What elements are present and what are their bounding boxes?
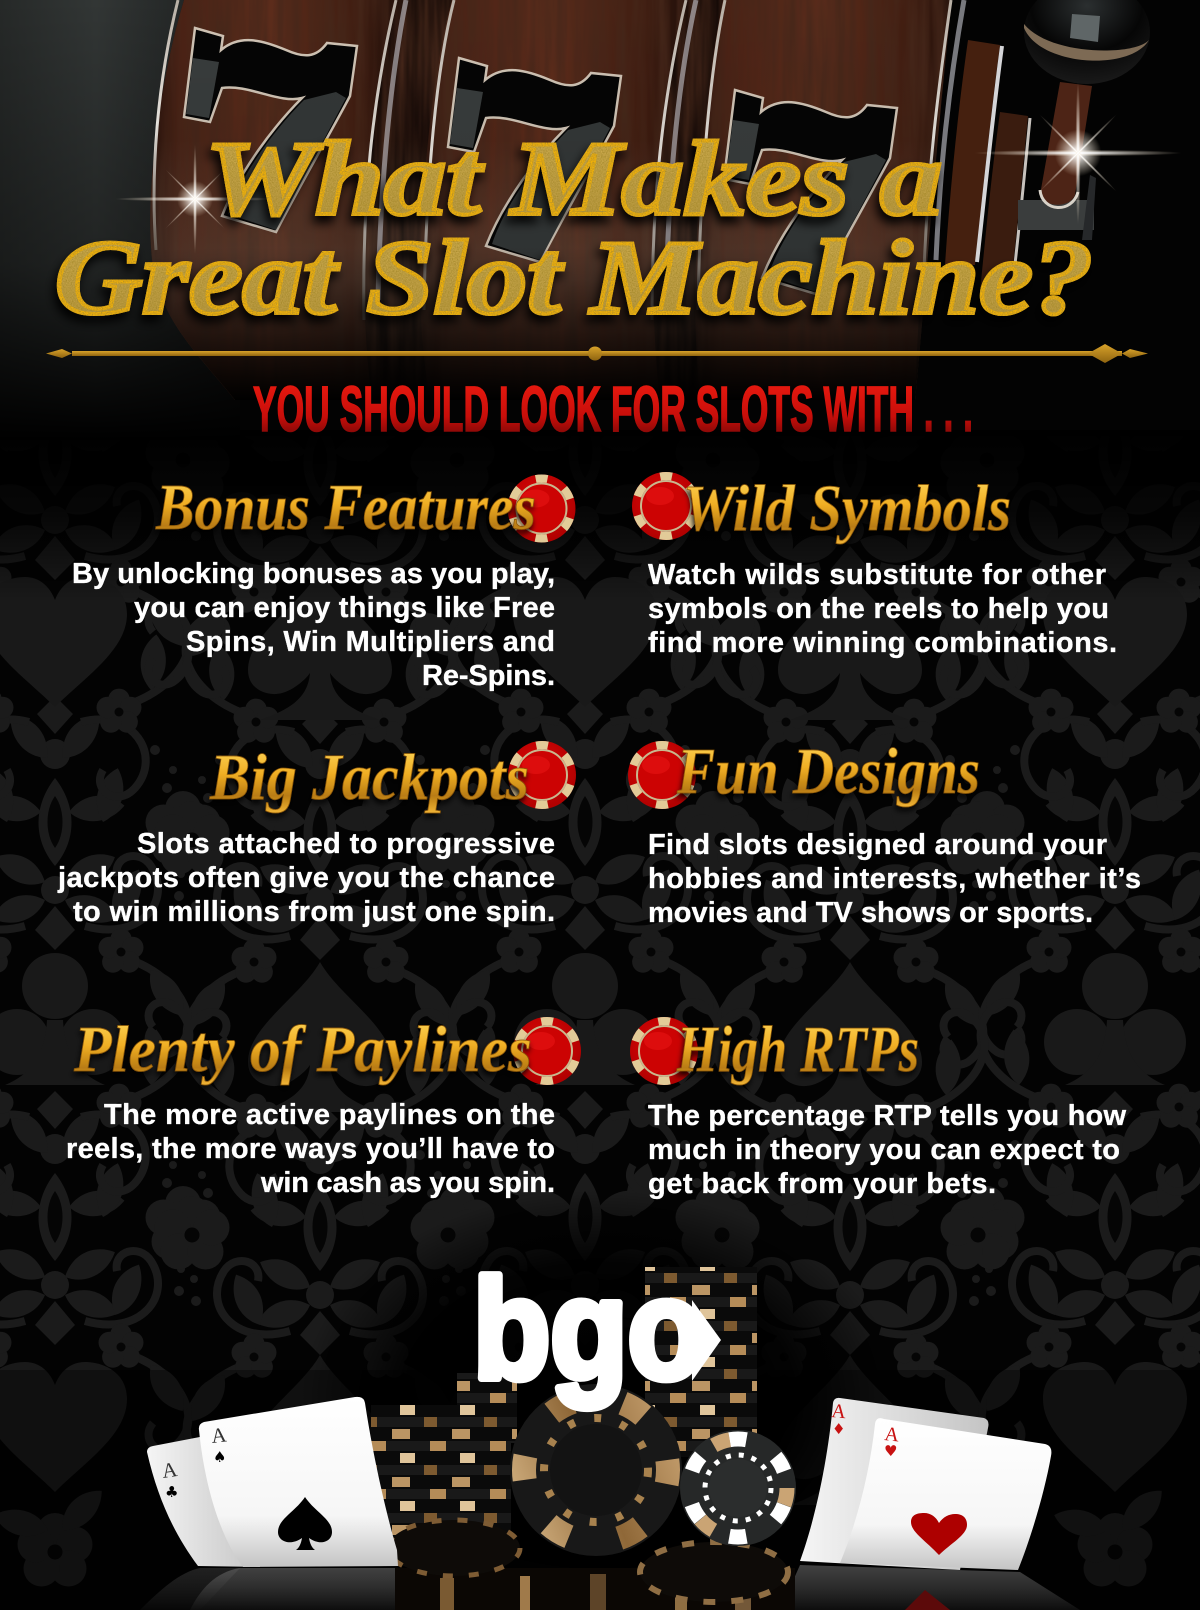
icon: red poker chip <box>632 472 700 540</box>
text: Plenty of Paylines description: win cash as you spin. <box>260 1167 555 1199</box>
illustration: ace of spades card <box>199 1397 398 1567</box>
icon: red poker chip <box>508 741 576 809</box>
title: Great Slot Machine? <box>55 219 1093 336</box>
illustration: ace of clubs card: ♣ <box>165 1483 178 1501</box>
feature: Plenty of Paylines <box>66 1013 581 1199</box>
text: Bonus Features description: Spins, Win Multipliers and <box>186 626 555 658</box>
heading: Big Jackpots: Big Jackpots <box>209 741 529 814</box>
illustration: large gold and black chip <box>502 1376 690 1564</box>
illustration: ace of spades card: ♠ <box>213 1448 226 1466</box>
illustration: ace of hearts card: ♥ <box>884 1442 897 1460</box>
text: Bonus Features description: you can enjoy things like Free <box>134 592 555 624</box>
text: High RTPs description: much in theory you can expect to <box>648 1134 1120 1166</box>
text: Big Jackpots description: jackpots often give you the chance <box>57 862 555 894</box>
icon: red poker chip <box>628 741 696 809</box>
icon: red poker chip <box>630 1017 698 1085</box>
heading: Fun Designs: Fun Designs <box>676 735 980 808</box>
illustration: ace of clubs card <box>147 1436 260 1567</box>
illustration: ace of hearts card <box>840 1418 1051 1570</box>
icon: heart <box>911 1513 967 1555</box>
wood grain <box>150 0 960 400</box>
text: Plenty of Paylines description <box>66 1099 555 1199</box>
feature: High RTPs <box>630 1013 1126 1200</box>
title: What Makes a <box>205 120 942 237</box>
reel 1 <box>150 0 395 400</box>
illustration: ace of diamonds card: ♦ <box>832 1420 845 1438</box>
text: Fun Designs description: movies and TV shows or sports. <box>648 897 1093 929</box>
icon: spade <box>278 1497 332 1550</box>
illustration: lying chips <box>388 1520 788 1602</box>
illustration: ace of diamonds card <box>800 1398 988 1570</box>
text: Big Jackpots description: to win millions from just one spin. <box>73 896 555 928</box>
flare: left sparkle <box>115 144 275 254</box>
sevens <box>184 28 357 232</box>
text: High RTPs description: The percentage RTP tells you how <box>648 1100 1126 1132</box>
illustration: ace of diamonds card: A <box>831 1400 847 1423</box>
divider: gold ornament line <box>46 344 1148 363</box>
text: Wild Symbols description: find more winning combinations. <box>648 627 1117 659</box>
text: Big Jackpots description <box>57 828 555 928</box>
heading: High RTPs: High RTPs <box>676 1013 919 1086</box>
icon: red poker chip <box>508 474 576 542</box>
reel 3 <box>695 0 950 400</box>
text: High RTPs description: get back from your bets. <box>648 1168 996 1200</box>
silver reel edges <box>154 0 951 320</box>
illustration: tall chip stack <box>645 1267 757 1457</box>
illustration: ace of hearts card: A <box>883 1423 901 1447</box>
heading: Plenty of Paylines: Plenty of Paylines <box>73 1013 532 1086</box>
text: Plenty of Paylines description: The more active paylines on the <box>104 1099 555 1131</box>
text: Wild Symbols description: symbols on the reels to help you <box>648 593 1109 625</box>
text: Fun Designs description: hobbies and interests, whether it’s <box>648 863 1141 895</box>
text: Big Jackpots description: Slots attached to progressive <box>137 828 555 860</box>
background: damask and card suit wallpaper <box>0 521 1200 1586</box>
text: Fun Designs description: Find slots designed around your <box>648 829 1107 861</box>
text: Wild Symbols description: Watch wilds substitute for other <box>648 559 1106 591</box>
feature: Wild Symbols <box>632 472 1117 659</box>
illustration: ace of clubs card: A <box>160 1457 180 1483</box>
feature: Bonus Features <box>72 471 576 692</box>
reel 2 <box>420 0 685 400</box>
heading: Bonus Features: Bonus Features <box>155 471 536 544</box>
side wood pieces <box>945 40 1000 265</box>
illustration: small white and black chip <box>680 1430 796 1546</box>
text: High RTPs description <box>648 1100 1126 1200</box>
illustration: wooden slot machine reels <box>150 0 1050 400</box>
title <box>55 120 1093 336</box>
illustration: slot machine lever <box>1018 0 1150 240</box>
text: Bonus Features description: By unlocking bonuses as you play, <box>72 558 555 590</box>
text: Fun Designs description <box>648 829 1141 929</box>
text: Plenty of Paylines description: reels, the more ways you’ll have to <box>66 1133 555 1165</box>
feature: Fun Designs <box>628 735 1141 929</box>
text: Bonus Features description: Re-Spins. <box>422 660 555 692</box>
text: Bonus Features description <box>72 558 555 692</box>
illustration: ace of spades card: A <box>210 1422 228 1448</box>
feature: Big Jackpots <box>57 741 576 928</box>
background: grey vignette top left <box>0 0 240 440</box>
text: Wild Symbols description <box>648 559 1117 659</box>
icon: red poker chip <box>513 1017 581 1085</box>
heading: Wild Symbols: Wild Symbols <box>683 472 1011 545</box>
flare: right sparkle <box>974 82 1182 224</box>
logo: bgo: bgo <box>473 1250 705 1409</box>
illustration: left chip stacks <box>371 1373 517 1555</box>
illustration: floor reflections <box>140 1565 1080 1610</box>
